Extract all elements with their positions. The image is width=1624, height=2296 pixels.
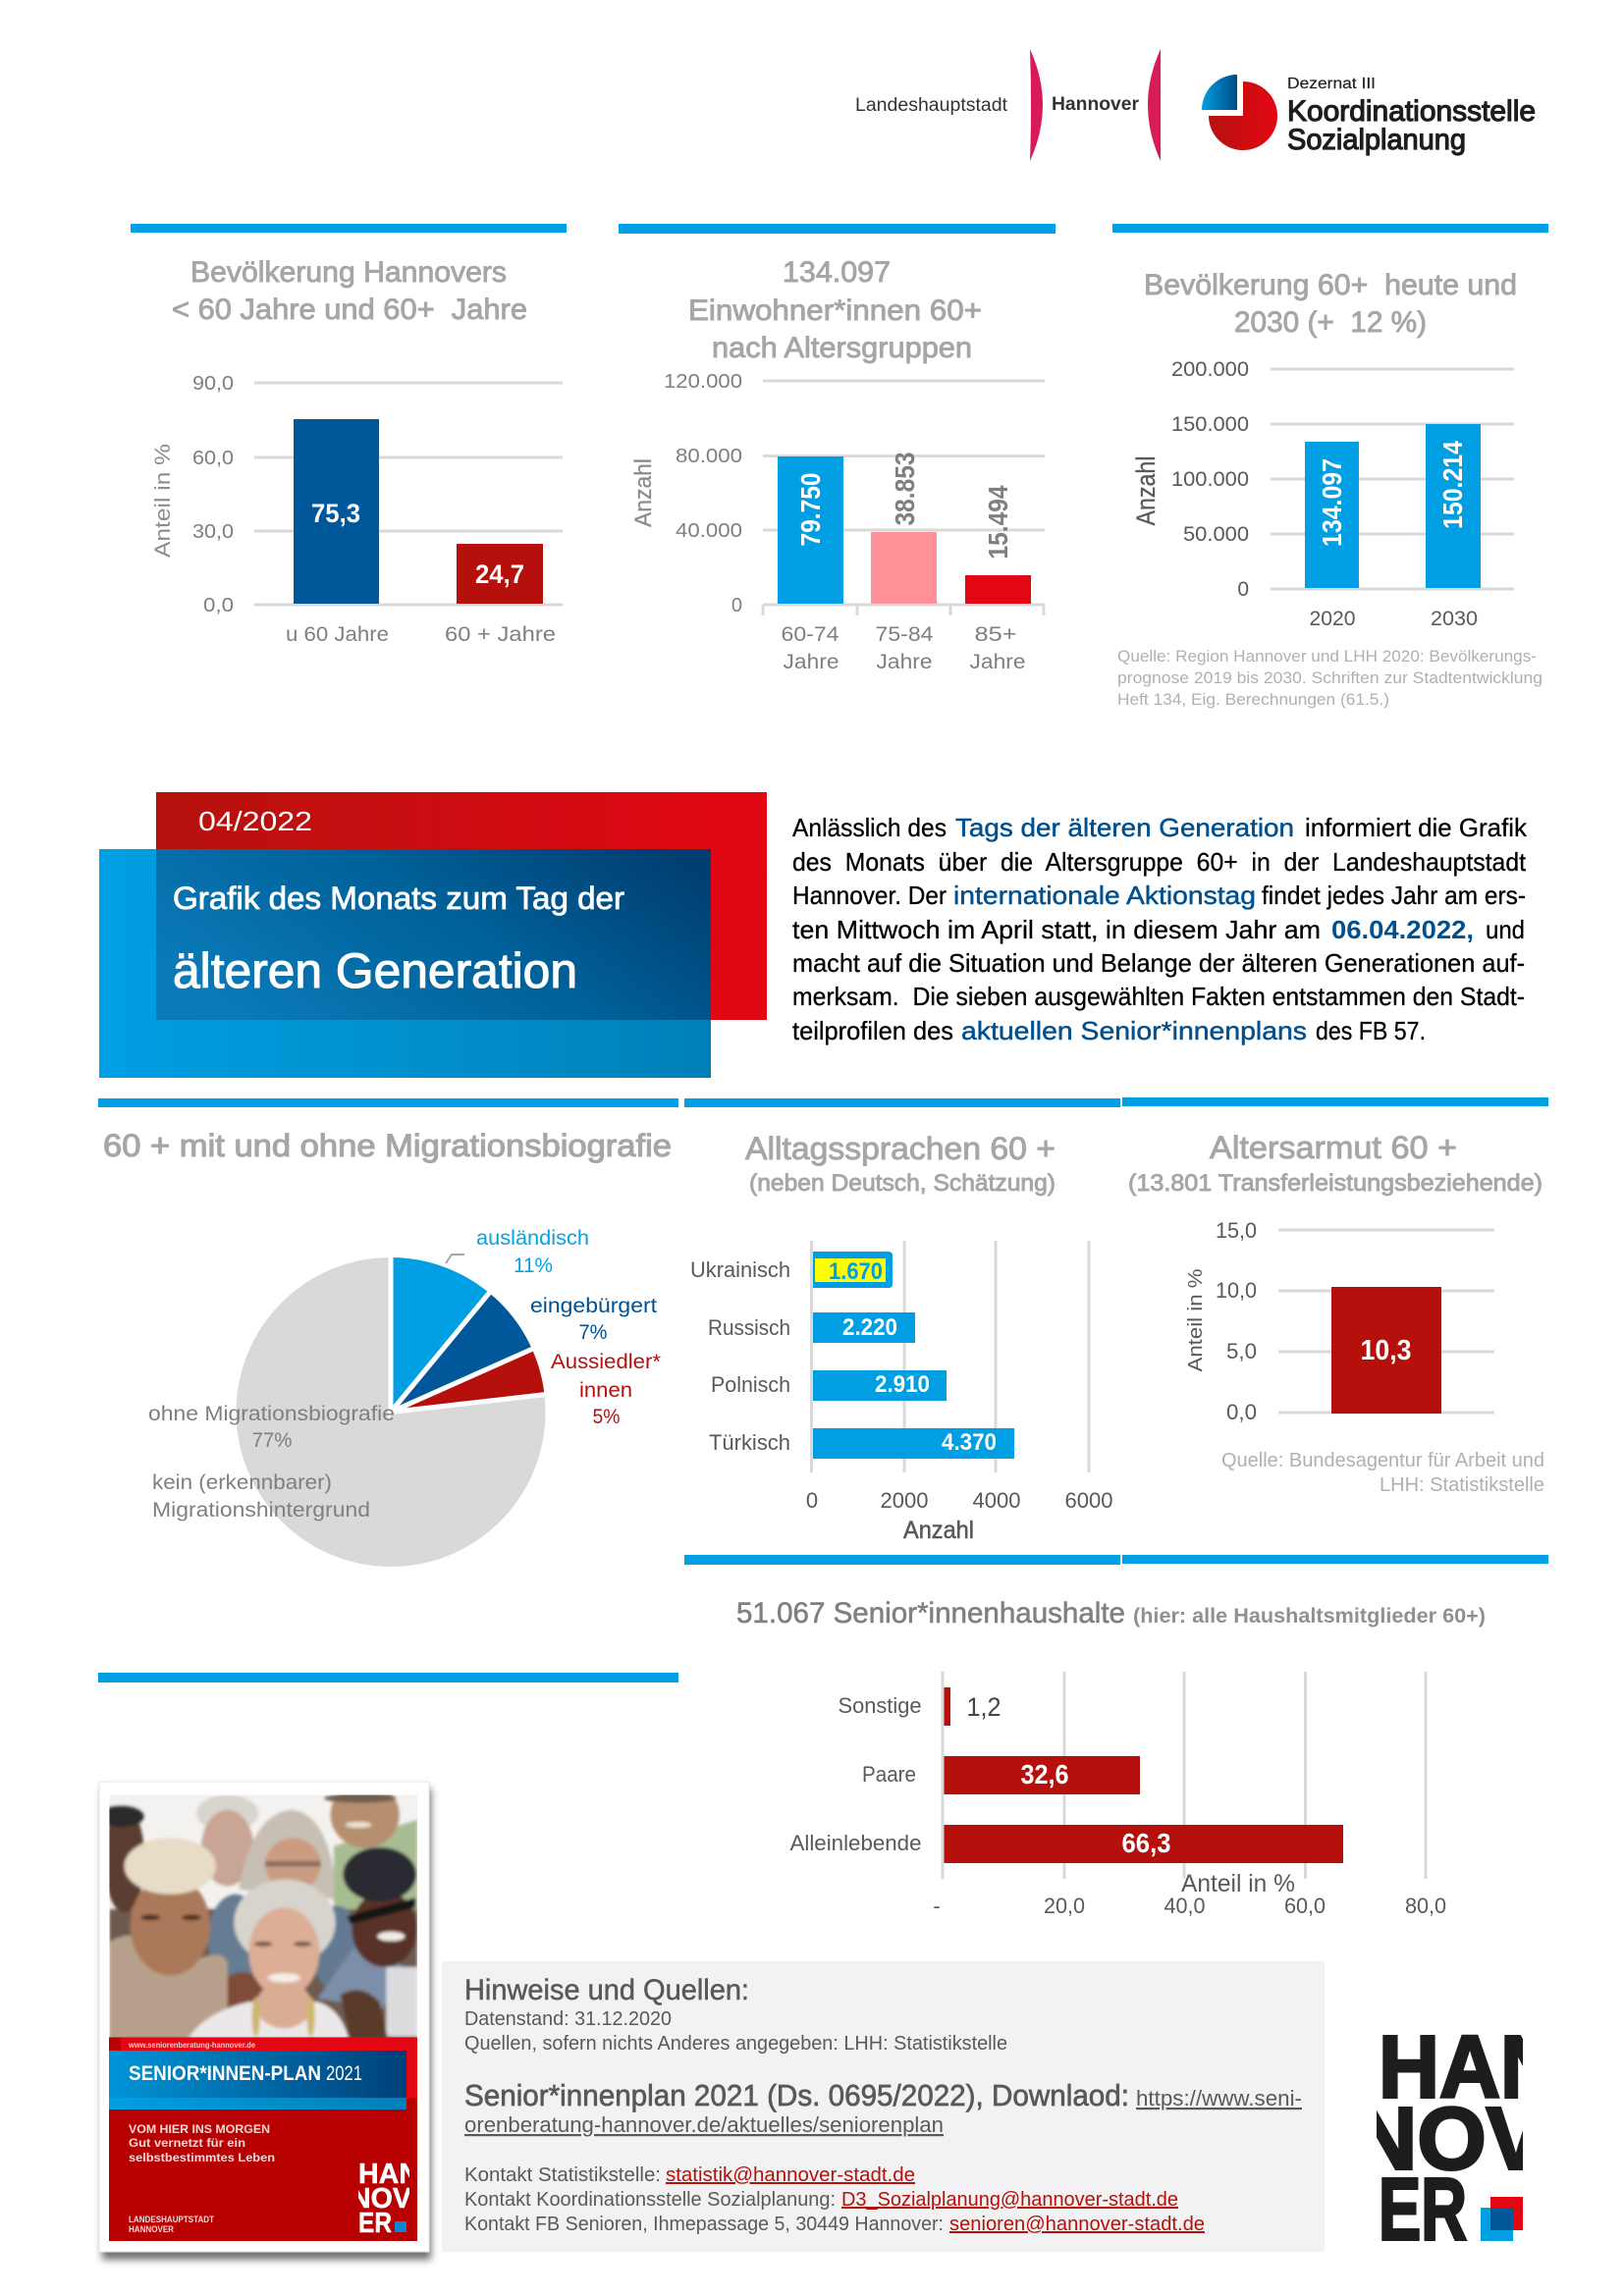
title banner: Grafik des Monats zum Tag der — [173, 881, 624, 916]
bar chart: Altersgruppen — [630, 371, 1045, 673]
intro text block: findet jedes Jahr am ers- — [1262, 881, 1526, 910]
heading: 134.097 Einwohner*innen 60+ — [688, 256, 982, 364]
bar chart: Haushalte: Paare — [862, 1762, 916, 1787]
bar chart: Haushalte: - — [933, 1894, 941, 1918]
bar chart: Altersgruppen: Jahre — [784, 651, 839, 673]
bar chart: Sprachen: Türkisch — [709, 1430, 790, 1455]
bar chart: Altersarmut: 5,0 — [1226, 1339, 1257, 1363]
bar chart: 2020 und 2030: 150.214 — [1437, 441, 1468, 529]
logo: Landeshauptstadt Hannover: Hannover — [1052, 94, 1140, 115]
brochure cover: Senior*innen-Plan 2021: selbstbestimmtes Leben — [129, 2151, 275, 2164]
intro text block: ten Mittwoch im April statt, in diesem Jahr am — [792, 915, 1321, 944]
pie chart — [148, 1227, 661, 1569]
logo: HANNOVER: ER — [1379, 2162, 1467, 2260]
bar chart: Altersarmut: 10,3 — [1361, 1335, 1412, 1366]
pie chart: ausländisch — [476, 1227, 589, 1250]
source note: Quelle: Bundesagentur für Arbeit und — [1221, 1450, 1544, 1471]
bar chart: Altersarmut: 10,0 — [1216, 1278, 1257, 1303]
intro text block: informiert die Grafik — [1305, 813, 1528, 842]
bar chart: Sprachen: 6000 — [1064, 1488, 1113, 1513]
bar chart: Altersgruppen: 60-74 — [782, 623, 839, 646]
bar chart: Haushalte: 20,0 — [1044, 1894, 1085, 1918]
panel: Hinweise und Quellen: Hinweise und Quellen: — [464, 1974, 749, 2006]
intro text block: internationale Aktionstag — [953, 881, 1256, 910]
bar chart: Altersgruppen: 0 — [731, 595, 742, 616]
intro text block: und — [1486, 915, 1525, 944]
panel: Hinweise und Quellen: Kontakt Koordinationsstelle Sozialplanung: — [464, 2189, 836, 2211]
pie chart: ohne Migrationsbiografie — [148, 1403, 395, 1425]
brochure cover: Senior*innen-Plan 2021: www.seniorenberatung-hannover.de — [128, 2041, 256, 2050]
bar chart: Haushalte: 32,6 — [1021, 1759, 1068, 1789]
source note: prognose 2019 bis 2030. Schriften zur Stadtentwicklung — [1117, 668, 1543, 687]
bar chart: Haushalte: 40,0 — [1164, 1894, 1206, 1918]
bar chart: Sprachen: Anzahl — [903, 1517, 974, 1544]
bar chart: Anteil unter und über 60: 30,0 — [192, 521, 234, 543]
bar chart: Sprachen: 2000 — [880, 1488, 929, 1513]
heading: 51.067 Senior*innenhaushalte: (hier: alle Haushaltsmitglieder 60+) — [1133, 1605, 1486, 1628]
bar chart: Anteil unter und über 60: Anteil in % — [150, 444, 175, 558]
heading: 60 + mit und ohne Migrationsbiografie: 60 + mit und ohne Migrationsbiografie — [103, 1128, 672, 1163]
bar chart: Altersgruppen: Anzahl — [630, 458, 657, 527]
intro text block: 06.04.2022, — [1331, 915, 1474, 944]
logo: Koordinationsstelle Sozialplanung: Koordinationsstelle — [1287, 95, 1536, 128]
heading: 51.067 Senior*innenhaushalte — [736, 1597, 1486, 1629]
heading: Alltagssprachen 60 +: (neben Deutsch, Schätzung) — [749, 1170, 1056, 1197]
bar chart: Altersgruppen: 15.494 — [983, 485, 1013, 560]
bar chart: Anteil unter und über 60: 0,0 — [203, 595, 234, 616]
logo: Landeshauptstadt Hannover — [855, 49, 1161, 161]
logo: HANNOVER: HAN — [1379, 2018, 1561, 2116]
intro text block: merksam. Die sieben ausgewählten Fakten entstammen den Stadt- — [792, 982, 1525, 1011]
bar chart: Haushalte — [789, 1672, 1446, 1918]
pie chart: 77% — [251, 1429, 293, 1452]
bar chart: Haushalte: 80,0 — [1405, 1894, 1446, 1918]
intro text block: Anlässlich des — [792, 813, 947, 842]
brochure cover: Senior*innen-Plan 2021: ER — [358, 2208, 392, 2239]
panel: Bevölkerung Hannovers — [131, 224, 567, 646]
brochure cover: Senior*innen-Plan 2021: 2021 — [326, 2062, 362, 2085]
bar chart: 2020 und 2030: 200.000 — [1171, 358, 1249, 381]
panel: Hinweise und Quellen: Kontakt FB Senioren, Ihmepassage 5, 30449 Hannover: — [464, 2214, 944, 2235]
bar chart: Altersgruppen: 120.000 — [664, 371, 742, 393]
panel: Hinweise und Quellen: https://www.seni- — [1136, 2086, 1302, 2110]
bar chart: Anteil unter und über 60: 90,0 — [192, 373, 234, 395]
bar chart: Altersarmut: 0,0 — [1226, 1400, 1257, 1424]
title banner — [99, 792, 767, 1078]
heading: 134.097 Einwohner*innen 60+: Einwohner*innen 60+ — [688, 294, 982, 327]
bar chart: Haushalte: Anteil in % — [1181, 1870, 1295, 1897]
heading: Altersarmut 60 +: Altersarmut 60 + — [1210, 1130, 1457, 1165]
heading: Bevölkerung Hannovers — [172, 256, 527, 326]
intro text block: des Monats über die Altersgruppe 60+ in der Landeshauptstadt — [792, 847, 1527, 877]
bar chart: 2020 und 2030: 0 — [1237, 578, 1249, 601]
panel: Hinweise und Quellen: Datenstand: 31.12.2020 — [464, 2008, 672, 2030]
brochure cover: Senior*innen-Plan 2021: HANNOVER — [129, 2224, 174, 2234]
panel: Hinweise und Quellen: Kontakt Statistikstelle: — [464, 2164, 661, 2186]
source note: Heft 134, Eig. Berechnungen (61.5.) — [1117, 690, 1389, 709]
bar chart: Altersgruppen: 40.000 — [676, 520, 742, 542]
bar chart: Anteil unter und über 60: 60 + Jahre — [445, 623, 556, 646]
bar chart: Altersgruppen: Jahre — [970, 651, 1025, 673]
panel: Hinweise und Quellen: Quellen, sofern nichts Anderes angegeben: LHH: Statistikstelle — [464, 2033, 1007, 2055]
bar chart: 2020 und 2030: 50.000 — [1183, 523, 1249, 546]
intro text block: des FB 57. — [1316, 1016, 1426, 1045]
heading: Alltagssprachen 60 + — [745, 1131, 1056, 1197]
heading: Bevölkerung 60+ heute und 2030: Bevölkerung 60+ heute und — [1144, 269, 1517, 301]
intro text block: macht auf die Situation und Belange der älteren Generationen auf- — [792, 948, 1525, 978]
bar chart: Sprachen: 4.370 — [942, 1429, 997, 1456]
title banner: älteren Generation — [173, 943, 577, 998]
bar chart: Altersarmut: Anteil in % — [1185, 1268, 1207, 1372]
panel: Senior*innenhaushalte — [736, 1597, 1486, 1918]
panel: Alltagssprachen — [684, 1098, 1120, 1565]
brochure cover: Senior*innen-Plan 2021: Gut vernetzt für ein — [129, 2136, 245, 2150]
panel: Einwohner nach Altersgruppen — [619, 224, 1056, 673]
heading: 134.097 Einwohner*innen 60+: nach Altersgruppen — [712, 332, 972, 364]
brochure cover: Senior*innen-Plan 2021: VOM HIER INS MORGEN — [129, 2122, 270, 2136]
source note: LHH: Statistikstelle — [1380, 1474, 1544, 1496]
heading: Bevölkerung 60+ heute und 2030 — [1144, 269, 1517, 339]
bar chart: Altersgruppen: 85+ — [974, 623, 1017, 646]
source note: Quelle: Region Hannover und LHH 2020: Bevölkerungs- — [1117, 647, 1537, 666]
heading: Alltagssprachen 60 +: Alltagssprachen 60 + — [745, 1131, 1056, 1166]
panel: Hinweise und Quellen: orenberatung-hannover.de/aktuelles/seniorenplan — [464, 2112, 944, 2137]
cover photo: group of seniors — [109, 1794, 417, 2038]
heading: Altersarmut 60 + — [1128, 1130, 1543, 1197]
bar chart: Sprachen: 4000 — [972, 1488, 1021, 1513]
bar chart: 2020 und 2030: 150.000 — [1171, 413, 1249, 436]
logo: Koordinationsstelle Sozialplanung: Sozialplanung — [1287, 124, 1466, 156]
logo: HANNOVER: NOV — [1353, 2091, 1545, 2189]
bar chart: 2020 und 2030 — [1131, 358, 1514, 630]
bar chart: Altersarmut: 15,0 — [1216, 1218, 1257, 1243]
panel: Migrationsbiografie — [98, 1098, 678, 1682]
bar chart: Anteil unter und über 60: 75,3 — [311, 499, 360, 528]
bar chart: 2020 und 2030: 100.000 — [1171, 468, 1249, 491]
bar chart: Haushalte: 60,0 — [1284, 1894, 1326, 1918]
bar chart: Sprachen: Ukrainisch — [690, 1257, 790, 1282]
panel: Hinweise und Quellen: senioren@hannover-stadt.de — [949, 2214, 1205, 2235]
pie chart: 5% — [593, 1406, 621, 1428]
bar chart: Haushalte: 66,3 — [1121, 1828, 1170, 1858]
bar chart: Anteil unter und über 60: u 60 Jahre — [286, 623, 389, 646]
logo: HANNOVER — [1377, 2034, 1523, 2241]
intro text block: aktuellen Senior*innenplans — [961, 1016, 1307, 1045]
pie chart: Aussiedler* — [551, 1351, 661, 1373]
logo: Koordinationsstelle Sozialplanung: Dezernat III — [1287, 76, 1376, 92]
bar chart: Altersgruppen: 75-84 — [876, 623, 934, 646]
bar chart: Altersgruppen: 80.000 — [676, 446, 742, 467]
heading: Bevölkerung Hannovers: < 60 Jahre und 60+ Jahre — [172, 294, 527, 326]
brochure cover: Senior*innen-Plan 2021: SENIOR*INNEN-PLAN — [129, 2062, 321, 2085]
bar chart: Altersarmut — [1185, 1218, 1494, 1424]
bar chart: 2020 und 2030: 2020 — [1310, 608, 1355, 630]
pie chart: 11% — [514, 1255, 553, 1277]
logo: Koordinationsstelle Sozialplanung — [1202, 75, 1536, 156]
panel: Hinweise und Quellen — [442, 1961, 1325, 2252]
bar chart: 2020 und 2030: Anzahl — [1131, 455, 1161, 526]
bar chart: 2020 und 2030: 134.097 — [1317, 458, 1347, 547]
bar chart: Sprachen — [690, 1241, 1113, 1544]
bar chart: Sprachen: 1.670 — [829, 1258, 883, 1285]
heading: 51.067 Senior*innenhaushalte: 51.067 Senior*innenhaushalte — [736, 1597, 1125, 1629]
bar chart: Altersgruppen: 79.750 — [795, 473, 826, 546]
pie chart: kein (erkennbarer) — [152, 1471, 332, 1494]
pie chart: 7% — [579, 1321, 607, 1344]
bar chart: Sprachen: Russisch — [708, 1315, 790, 1340]
brochure cover: Senior*innen-Plan 2021: HAN — [358, 2159, 419, 2190]
pie chart: Migrationshintergrund — [152, 1499, 370, 1522]
bar chart: Sprachen: 0 — [806, 1488, 818, 1513]
panel: Hinweise und Quellen: statistik@hannover-stadt.de — [666, 2164, 915, 2186]
pie chart: eingebürgert — [530, 1295, 657, 1317]
panel: Hinweise und Quellen: Senior*innenplan 2021 (Ds. 0695/2022), Downlaod: — [464, 2078, 1129, 2112]
panel: Bevölkerung 60+ heute und 2030 — [1112, 224, 1548, 709]
bar chart: Haushalte: Sonstige — [839, 1693, 921, 1718]
logo: Landeshauptstadt Hannover: Landeshauptstadt — [855, 95, 1008, 116]
heading: Bevölkerung Hannovers: Bevölkerung Hannovers — [190, 256, 507, 289]
bar chart: Altersgruppen: Jahre — [876, 651, 933, 673]
bar chart: Sprachen: Polnisch — [711, 1372, 790, 1397]
heading: 134.097 Einwohner*innen 60+: 134.097 — [783, 256, 891, 289]
panel: Altersarmut — [1122, 1097, 1548, 1564]
pie chart: innen — [579, 1379, 632, 1402]
panel: Hinweise und Quellen: D3_Sozialplanung@hannover-stadt.de — [841, 2189, 1178, 2211]
source note — [1221, 1450, 1544, 1496]
bar chart: Altersgruppen: 38.853 — [890, 452, 920, 526]
brochure cover: Senior*innen-Plan 2021 — [98, 1782, 431, 2260]
intro text block: Hannover. Der — [792, 881, 947, 910]
heading: Altersarmut 60 +: (13.801 Transferleistungsbeziehende) — [1128, 1170, 1543, 1197]
bar chart: Sprachen: 2.220 — [842, 1314, 897, 1341]
bar chart: Anteil unter und über 60: 24,7 — [475, 560, 524, 589]
intro text block — [792, 813, 1528, 1045]
source note — [1117, 647, 1543, 709]
bar chart: Anteil unter und über 60: 60,0 — [192, 448, 234, 469]
title banner: 04/2022 — [198, 806, 312, 836]
bar chart: Anteil unter und über 60 — [150, 373, 563, 646]
heading: Bevölkerung 60+ heute und 2030: 2030 (+ 12 %) — [1234, 306, 1427, 339]
intro text block: teilprofilen des — [792, 1016, 953, 1045]
intro text block: Tags der älteren Generation — [955, 813, 1294, 842]
brochure cover: Senior*innen-Plan 2021: LANDESHAUPTSTADT — [129, 2215, 214, 2224]
bar chart: Haushalte: Alleinlebende — [789, 1831, 921, 1855]
bar chart: Sprachen: 2.910 — [875, 1371, 930, 1398]
bar chart: 2020 und 2030: 2030 — [1431, 608, 1478, 630]
brochure cover: Senior*innen-Plan 2021: NOV — [351, 2183, 412, 2215]
bar chart: Haushalte: 1,2 — [966, 1692, 1001, 1722]
